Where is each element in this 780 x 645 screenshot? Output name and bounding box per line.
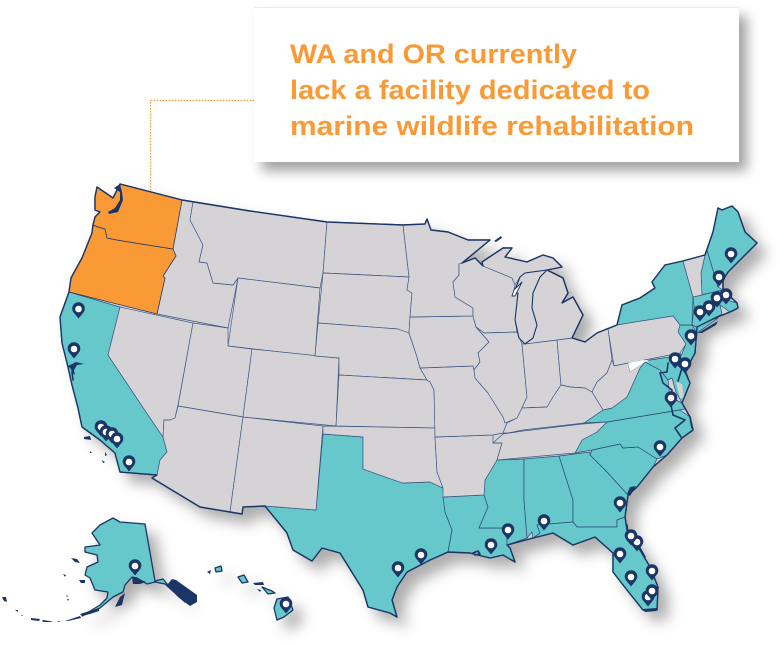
pin: North Florida xyxy=(625,529,637,546)
Alaska coast marks xyxy=(79,577,146,616)
location pins xyxy=(68,247,737,614)
Aleutian Islands xyxy=(2,597,81,622)
state: Kansas xyxy=(336,375,435,428)
state: Idaho xyxy=(157,200,238,328)
Florida east coast xyxy=(627,525,645,557)
Green Bay xyxy=(512,282,522,296)
state: Tennessee xyxy=(493,422,607,460)
state: Alabama xyxy=(524,456,573,538)
pin: Florida Gulf north xyxy=(614,547,626,564)
state: Michigan upper peninsula xyxy=(482,248,562,285)
pin: South Texas xyxy=(392,561,404,578)
pin: Florida Gulf south xyxy=(625,570,637,586)
pin: Mississippi xyxy=(502,523,514,540)
state: North Carolina xyxy=(575,410,693,459)
state: Nebraska xyxy=(315,323,427,380)
callout text: lack a facility dedicated to xyxy=(290,75,650,105)
pin: Florida east coast xyxy=(631,535,643,552)
pin: Florida Keys xyxy=(642,590,654,606)
Georgia and Florida coast marks xyxy=(627,486,657,612)
panel: grey states xyxy=(108,200,705,514)
state: Illinois xyxy=(474,327,527,423)
land silhouette shadow layer xyxy=(60,184,757,620)
state: Indiana xyxy=(522,340,561,408)
state: Iowa xyxy=(409,316,489,370)
state: Virginia xyxy=(584,362,685,423)
pin: Northern California xyxy=(72,302,85,318)
coastline outline xyxy=(60,184,757,617)
pin: Connecticut east xyxy=(703,300,715,316)
state: Georgia xyxy=(559,452,628,527)
state: Kentucky xyxy=(503,385,603,433)
pin: Massachusetts xyxy=(711,291,723,308)
contiguous US base xyxy=(60,184,757,617)
Delaware Bay xyxy=(677,364,682,381)
Bering Sea islands xyxy=(63,558,80,601)
pin: Delaware xyxy=(679,357,691,374)
callout card xyxy=(254,7,739,162)
state: North Dakota xyxy=(323,222,409,277)
pin: Galveston xyxy=(415,548,427,564)
Chesapeake Bay xyxy=(660,363,673,415)
Long Island xyxy=(698,321,718,333)
pin: Maine xyxy=(725,247,737,264)
pin: Virginia xyxy=(665,391,677,408)
coastal water and island details xyxy=(2,184,718,622)
state: Massachusetts xyxy=(693,290,738,312)
state: Minnesota xyxy=(403,219,490,317)
state: Louisiana xyxy=(443,495,515,562)
Delmarva grey strip xyxy=(676,382,684,398)
pin: Baltimore xyxy=(669,352,681,368)
pin: New Hampshire coast xyxy=(713,270,725,286)
card top edge xyxy=(254,7,739,8)
US map xyxy=(2,184,757,622)
pin: Orange County xyxy=(111,432,123,448)
callout text: marine wildlife rehabilitation xyxy=(290,111,694,141)
state: New Mexico xyxy=(230,417,323,514)
pin: Georgia xyxy=(614,496,626,512)
state: California xyxy=(60,292,167,475)
state: Florida xyxy=(533,517,658,610)
panel: teal states with rehabilitation facilities xyxy=(60,206,757,617)
callout text: WA and OR currently xyxy=(290,39,577,69)
pin: Los Angeles xyxy=(106,427,118,444)
pin: Hawaii xyxy=(280,597,292,614)
pin: North Carolina xyxy=(654,440,666,456)
Outer Banks xyxy=(690,417,692,428)
state: Wyoming xyxy=(228,278,320,356)
state: Colorado xyxy=(243,349,339,426)
state: Arkansas xyxy=(435,435,502,497)
state: Wisconsin xyxy=(453,258,518,333)
pin: Alaska xyxy=(129,559,141,576)
state: New Hampshire xyxy=(701,250,723,295)
pin: Miami xyxy=(646,584,658,600)
state: Maine xyxy=(707,206,757,287)
San Francisco Bay xyxy=(68,362,84,375)
state: New Jersey xyxy=(677,325,697,372)
state: Vermont xyxy=(683,255,705,297)
pin: New Jersey xyxy=(685,329,697,346)
pin: Florida Atlantic xyxy=(646,564,658,580)
Pamlico and Albemarle Sounds xyxy=(673,415,685,437)
card background xyxy=(254,7,739,162)
state: Arizona xyxy=(152,406,243,512)
coastal inlets: Chesapeake, Pamlico, Gulf xyxy=(72,363,692,557)
panel: WA and OR highlighted states xyxy=(69,184,182,314)
Alaska base xyxy=(82,518,185,616)
state: Nevada xyxy=(108,307,193,437)
state: Mississippi xyxy=(479,459,527,545)
state: New York xyxy=(617,261,718,333)
state: Connecticut and Rhode Island xyxy=(692,305,722,327)
pin: San Francisco xyxy=(68,342,80,358)
state: Ohio xyxy=(557,328,612,392)
Hawaii small islands xyxy=(207,570,264,592)
state: South Carolina xyxy=(590,444,657,495)
dotted leader line from callout to Washington xyxy=(150,100,254,192)
pin: Connecticut west xyxy=(694,305,706,322)
state: Oklahoma xyxy=(323,426,443,488)
Channel Islands xyxy=(84,436,107,463)
San Pablo inlet xyxy=(72,372,73,380)
Louisiana lake xyxy=(473,551,480,555)
pin: San Diego xyxy=(123,455,135,472)
state: Utah xyxy=(178,323,252,417)
state: Montana xyxy=(190,202,327,288)
Lake Michigan outline xyxy=(513,270,547,344)
state: Missouri xyxy=(420,366,507,437)
state: South Dakota xyxy=(318,273,412,333)
state: Michigan lower peninsula xyxy=(525,270,583,344)
pin: Cape Cod xyxy=(720,288,732,304)
Alaska panhandle xyxy=(167,579,197,606)
Hawaii base xyxy=(215,566,293,620)
pin: Louisiana xyxy=(485,538,497,554)
pin: Alabama xyxy=(538,514,550,530)
Puget Sound xyxy=(108,184,123,214)
Lake Superior island xyxy=(494,236,502,242)
state: Washington xyxy=(93,184,182,249)
pin: Santa Barbara xyxy=(95,420,107,436)
state: Texas xyxy=(265,434,452,617)
uncoloured Maryland panhandle xyxy=(628,360,650,372)
state: West Virginia xyxy=(592,360,645,410)
state: Pennsylvania xyxy=(608,316,686,366)
state: Oregon xyxy=(69,225,176,314)
pin: Ventura xyxy=(100,425,112,442)
state: Maryland and Delaware xyxy=(645,353,690,403)
